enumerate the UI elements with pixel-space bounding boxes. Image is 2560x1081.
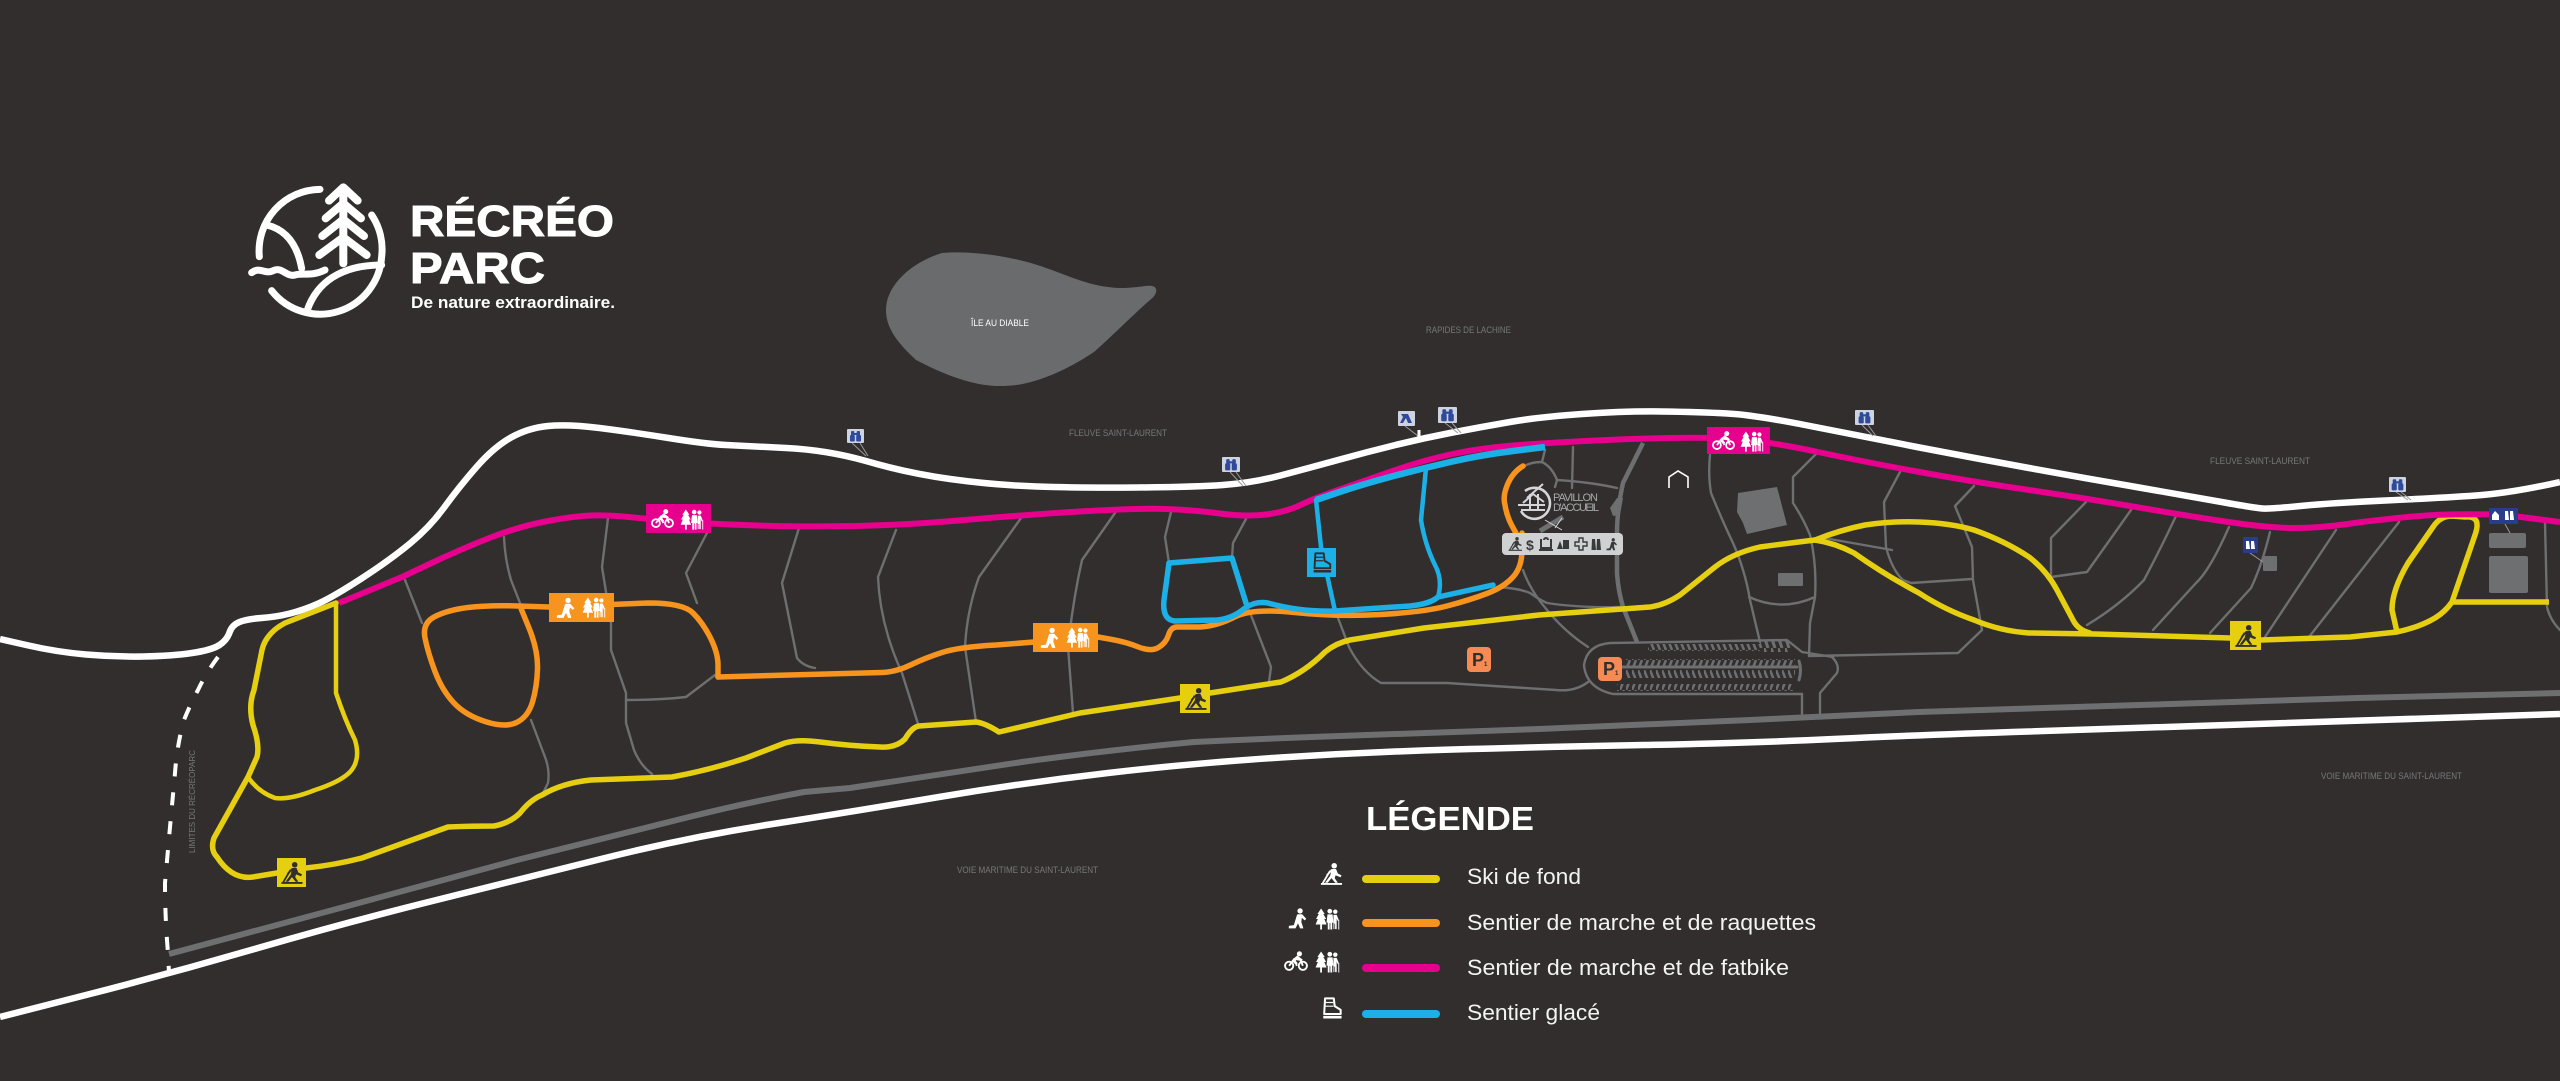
water labels: VOIE MARITIME DU SAINT-LAURENT [2321, 771, 2462, 781]
water labels: FLEUVE SAINT-LAURENT [1069, 428, 1167, 438]
arch marker [1669, 471, 1688, 488]
island: Île au Diable [886, 252, 1156, 386]
trail: sentier glacé (blue) [1164, 447, 1545, 621]
legend row: sentier glacé [1323, 998, 1600, 1025]
water labels: RAPIDES DE LACHINE [1426, 325, 1511, 335]
pavillon emblem [1518, 484, 1550, 519]
parking P1: P [1472, 650, 1484, 670]
parking P1: 1 [1484, 662, 1488, 668]
logo emblem [252, 187, 382, 314]
badge: raquettes west [549, 593, 614, 622]
lookout signs [847, 407, 2518, 562]
logo: Récréoparc: PARC [410, 244, 545, 293]
legend row: marche et raquettes: Sentier de marche et de raquettes [1467, 910, 1816, 935]
badge: ski west [277, 858, 306, 887]
pavillon d'accueil: D'ACCUEIL [1553, 502, 1599, 514]
trail: ski de fond (yellow) [213, 516, 2549, 877]
parking P2: P [1603, 659, 1615, 679]
badge: raquettes center [1033, 623, 1098, 652]
water labels: FLEUVE SAINT-LAURENT [2210, 456, 2310, 466]
pavillon d'accueil [1518, 484, 1599, 531]
parking P1 [1467, 647, 1491, 672]
gray buildings [1610, 487, 2528, 593]
parking signs [1467, 647, 1622, 681]
logo: Récréoparc [252, 187, 615, 314]
badge: fatbike west [646, 504, 711, 533]
gray secondary paths [405, 447, 2560, 795]
legend title: LÉGENDE [1366, 800, 1534, 837]
parking P2: 1 [1615, 671, 1619, 677]
legend row: marche et fatbike [1285, 951, 1789, 980]
parking lot [1584, 640, 1833, 694]
logo wordmark: RÉCRÉO [410, 196, 614, 246]
badge: ski center [1180, 684, 1210, 713]
legend row: marche et raquettes [1289, 908, 1816, 935]
park limit dashed line [165, 657, 218, 973]
services panel: $ [1526, 537, 1534, 553]
gray road along seaway [169, 693, 2560, 954]
legend [1285, 800, 1816, 1025]
legend row: ski de fond [1321, 863, 1581, 889]
shoreline south [0, 714, 2560, 1017]
water labels: VOIE MARITIME DU SAINT-LAURENT [957, 865, 1098, 875]
badge: sentier glacé [1307, 548, 1336, 577]
pavillon label: PAVILLON [1553, 492, 1598, 504]
logo tagline: De nature extraordinaire. [411, 293, 615, 312]
services panel [1502, 533, 1623, 555]
pavillon entry marker [1540, 517, 1563, 531]
water labels [187, 325, 2462, 875]
legend row: marche et fatbike: Sentier de marche et de fatbike [1467, 955, 1789, 980]
legend row: ski de fond: Ski de fond [1467, 864, 1581, 889]
badge: ski east [2230, 621, 2261, 650]
legend row: sentier glacé: Sentier glacé [1467, 1000, 1600, 1025]
badge: fatbike east [1707, 427, 1770, 454]
trail: marche et raquettes (orange) [424, 466, 1523, 725]
shoreline north [0, 411, 2560, 657]
island: Île au Diable: ÎLE AU DIABLE [970, 318, 1029, 329]
parking P2 [1598, 657, 1622, 681]
water labels: LIMITES DU RÉCRÉOPARC [187, 750, 197, 853]
trail: marche et fatbike (magenta) [339, 438, 2560, 603]
main access road [1617, 443, 1643, 642]
